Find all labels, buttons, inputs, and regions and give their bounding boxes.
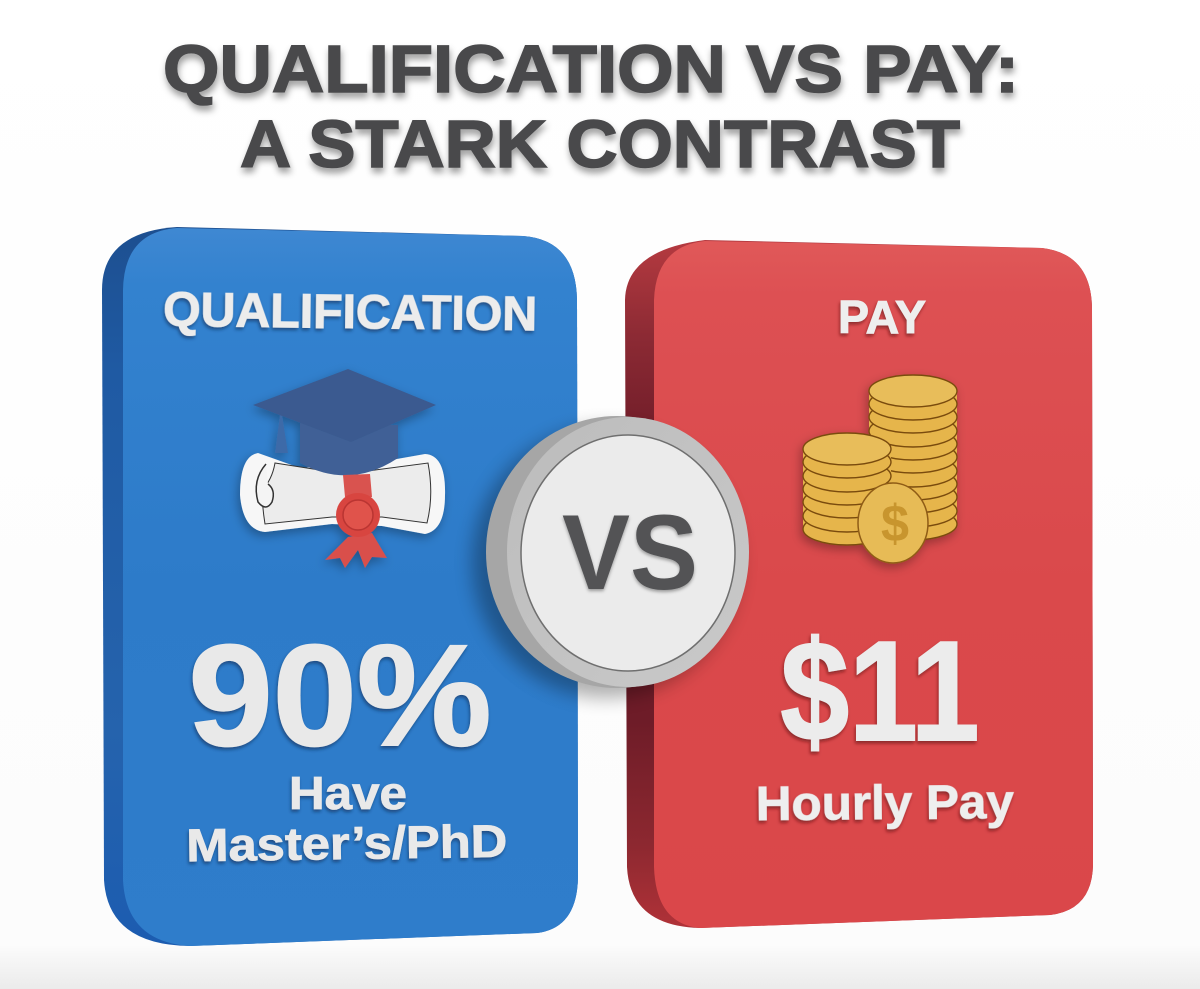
tassel bbox=[275, 415, 288, 453]
icon: graduation cap and diploma bbox=[240, 369, 445, 568]
title: A STARK CONTRAST bbox=[240, 107, 960, 182]
coin: dollar bbox=[858, 483, 928, 563]
panel: pay bbox=[625, 240, 1093, 928]
vs badge bbox=[472, 416, 749, 698]
stat: $11: $11 bbox=[780, 612, 980, 771]
title: QUALIFICATION VS PAY: bbox=[163, 32, 1019, 107]
diploma scroll bbox=[240, 453, 445, 534]
coin stack front bbox=[803, 433, 891, 545]
heading: qualification: QUALIFICATION bbox=[163, 284, 537, 341]
label: have master's/phd bbox=[186, 767, 508, 871]
dollar sign: $ bbox=[881, 495, 909, 553]
coin stack back bbox=[869, 375, 957, 540]
ribbon tails bbox=[325, 533, 387, 568]
stat: 90%: 90% bbox=[188, 615, 492, 776]
heading: pay: PAY bbox=[838, 291, 926, 343]
label: hourly pay: Hourly Pay bbox=[756, 776, 1014, 831]
seal bbox=[336, 493, 380, 537]
label: have master's/phd: Have bbox=[289, 767, 407, 819]
cap base bbox=[300, 423, 398, 475]
ribbon band bbox=[343, 474, 372, 497]
icon: coin stacks bbox=[803, 375, 957, 563]
label: have master's/phd: Master’s/PhD bbox=[186, 815, 508, 871]
vs text: VS bbox=[562, 492, 698, 612]
title bbox=[163, 32, 1019, 182]
panel: qualification bbox=[102, 227, 578, 946]
cap top bbox=[253, 369, 436, 442]
